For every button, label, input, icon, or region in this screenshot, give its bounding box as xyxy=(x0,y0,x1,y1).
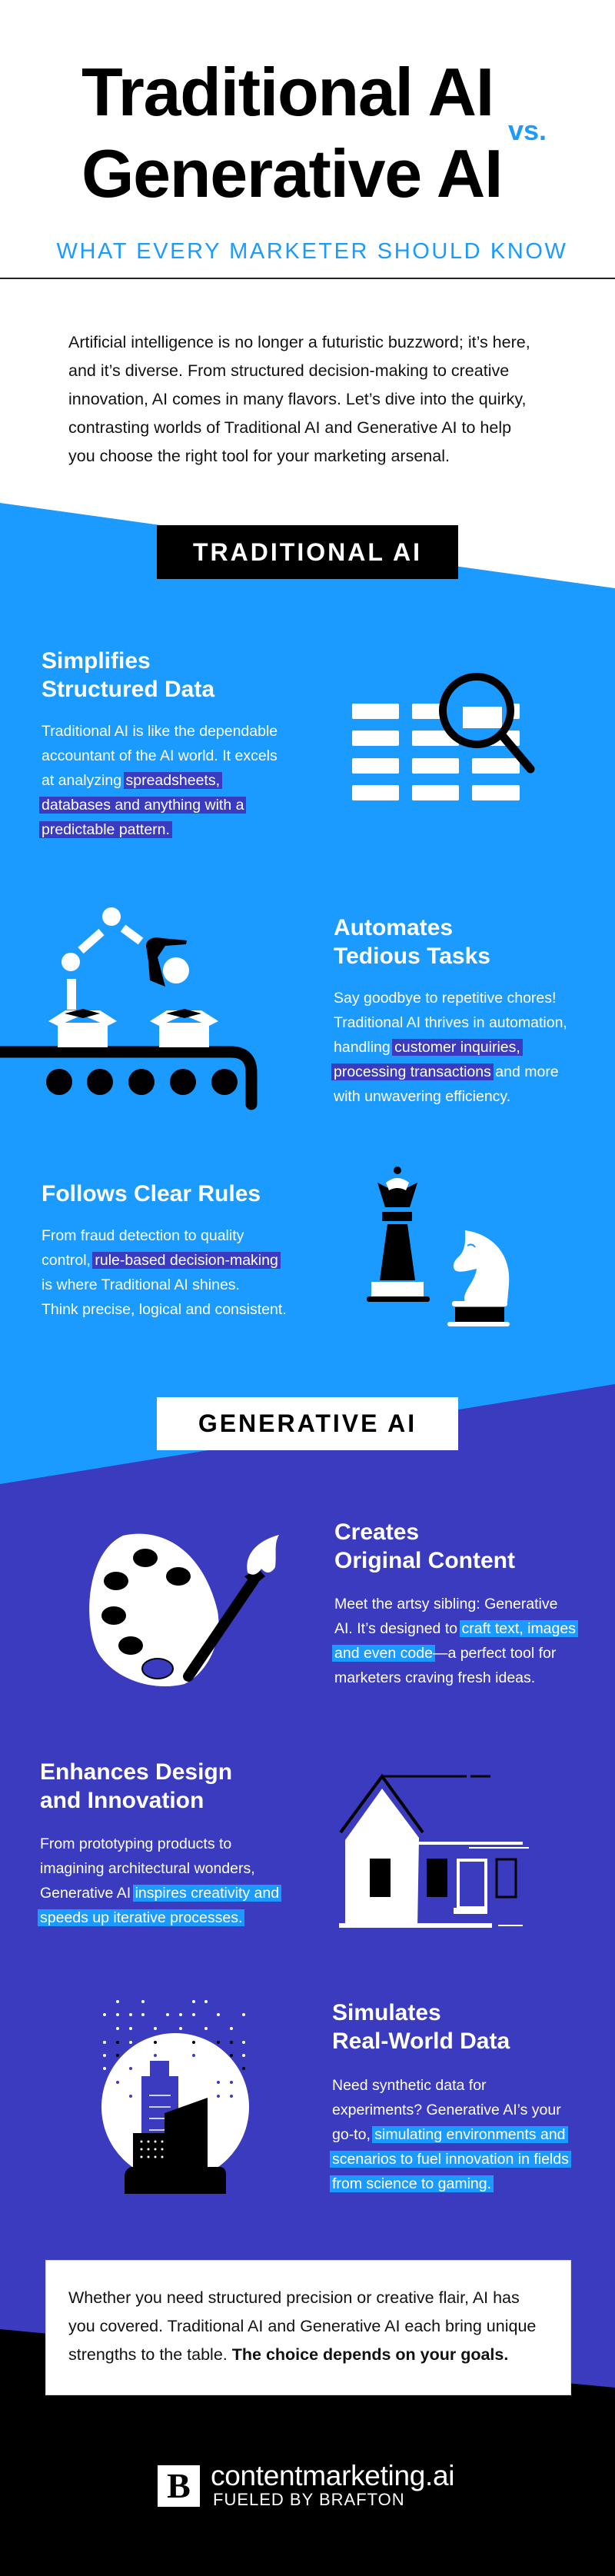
intro text: contrasting worlds of Traditional AI and Generative AI to help xyxy=(68,418,511,437)
text: creates: and even code—a perfect tool for xyxy=(334,1645,556,1662)
text: simplifies: databases and anything with a xyxy=(42,797,244,814)
text: creates: Meet the artsy sibling: Generative xyxy=(334,1596,557,1612)
text: creates: marketers craving fresh ideas. xyxy=(334,1669,535,1686)
heading: automates tedious tasks: Automates xyxy=(334,915,453,940)
text: simplifies: predictable pattern. xyxy=(42,821,170,838)
text: follows clear rules: is where Traditional AI shines. xyxy=(42,1276,240,1293)
logo xyxy=(158,2460,454,2509)
conclusion box: strengths to the table. The choice depends on your goals. xyxy=(68,2345,508,2364)
heading: automates tedious tasks: Tedious Tasks xyxy=(334,944,490,969)
icon: chess queen and knight xyxy=(367,1167,510,1326)
text: simplifies: accountant of the AI world. It excels xyxy=(42,747,278,764)
heading: creates original content xyxy=(334,1519,515,1573)
text: enhances xyxy=(38,1835,281,1926)
text: automates: processing transactions and more xyxy=(334,1063,559,1080)
text: simplifies: at analyzing spreadsheets, xyxy=(42,772,220,789)
text: simulates: experiments? Generative AI’s your xyxy=(332,2102,561,2118)
text: simulates: scenarios to fuel innovation in fields xyxy=(332,2151,569,2168)
text: enhances: From prototyping products to xyxy=(40,1835,231,1852)
title xyxy=(81,54,547,211)
text: simulates xyxy=(330,2077,571,2192)
text: simulates: from science to gaming. xyxy=(332,2175,491,2192)
heading: automates tedious tasks xyxy=(334,915,490,969)
icon: spreadsheet with magnifier xyxy=(352,673,535,800)
intro text: Artificial intelligence is no longer a futuristic buzzword; it’s here, xyxy=(68,333,530,351)
text: automates xyxy=(331,990,567,1105)
text: enhances: speeds up iterative processes. xyxy=(40,1909,242,1926)
intro text: innovation, AI comes in many flavors. Let’s dive into the quirky, xyxy=(68,390,527,408)
logo: contentmarketing.ai xyxy=(211,2460,454,2491)
text: follows clear rules: control, rule-based decision-making xyxy=(42,1252,278,1269)
icon: robot arm conveyor xyxy=(0,907,257,1110)
text: simulates: Need synthetic data for xyxy=(332,2077,487,2094)
heading: creates original content: Original Content xyxy=(334,1548,515,1573)
text: simplifies: Traditional AI is like the dependable xyxy=(42,723,278,740)
text: creates: AI. It’s designed to craft text, images xyxy=(334,1620,576,1637)
text: follows clear rules: Think precise, logical and consistent. xyxy=(42,1301,287,1318)
logo: FUELED BY BRAFTON xyxy=(213,2490,405,2509)
heading: enhances design: Enhances Design xyxy=(40,1759,232,1785)
intro text: you choose the right tool for your marketing arsenal. xyxy=(68,447,450,465)
heading: creates original content: Creates xyxy=(334,1519,419,1545)
subtitle: WHAT EVERY MARKETER SHOULD KNOW xyxy=(57,239,567,264)
text: automates: with unwavering efficiency. xyxy=(334,1088,510,1105)
section header: traditional AI: TRADITIONAL AI xyxy=(193,538,422,566)
text: automates: Traditional AI thrives in automation, xyxy=(334,1014,567,1031)
icon: palette and brush xyxy=(89,1533,279,1686)
text: automates: handling customer inquiries, xyxy=(334,1039,520,1056)
intro text: and it’s diverse. From structured decision-making to creative xyxy=(68,361,509,380)
heading: enhances design xyxy=(40,1759,232,1813)
text: enhances: Generative AI inspires creativity and xyxy=(40,1885,279,1902)
section header: generative AI xyxy=(157,1397,458,1450)
intro text xyxy=(68,333,530,465)
heading: follows clear rules: Follows Clear Rules xyxy=(42,1181,261,1206)
text: simulates: go-to, simulating environments and xyxy=(332,2126,566,2143)
heading: simplifies structured data: Simplifies xyxy=(42,648,151,674)
heading: simulates real-world data: Real-World Data xyxy=(332,2029,510,2054)
text: follows clear rules xyxy=(42,1227,287,1318)
text: simplifies xyxy=(39,723,278,838)
text: follows clear rules: From fraud detection to quality xyxy=(42,1227,244,1244)
heading: simplifies structured data: Structured Data xyxy=(42,677,214,702)
text: enhances: imagining architectural wonders, xyxy=(40,1860,255,1877)
section header: generative AI: GENERATIVE AI xyxy=(198,1409,417,1437)
text: automates: Say goodbye to repetitive chores! xyxy=(334,990,556,1007)
heading: simplifies structured data xyxy=(42,648,215,702)
title: vs. xyxy=(508,115,547,146)
logo: B xyxy=(167,2466,191,2505)
heading: enhances design: and Innovation xyxy=(40,1788,204,1813)
conclusion box: Whether you need structured precision or creative flair, AI has xyxy=(68,2288,520,2307)
title: Generative AI xyxy=(81,135,502,211)
heading: simulates real-world data xyxy=(332,2000,510,2054)
section header: traditional AI xyxy=(157,525,458,579)
text: creates xyxy=(332,1596,578,1686)
conclusion box: you covered. Traditional AI and Generative AI each bring unique xyxy=(68,2317,536,2335)
conclusion box xyxy=(45,2260,571,2395)
icon: city simulation globe xyxy=(101,2000,249,2194)
heading: simulates real-world data: Simulates xyxy=(332,2000,441,2025)
title: Traditional AI xyxy=(81,54,494,130)
icon: house xyxy=(339,1773,529,1928)
